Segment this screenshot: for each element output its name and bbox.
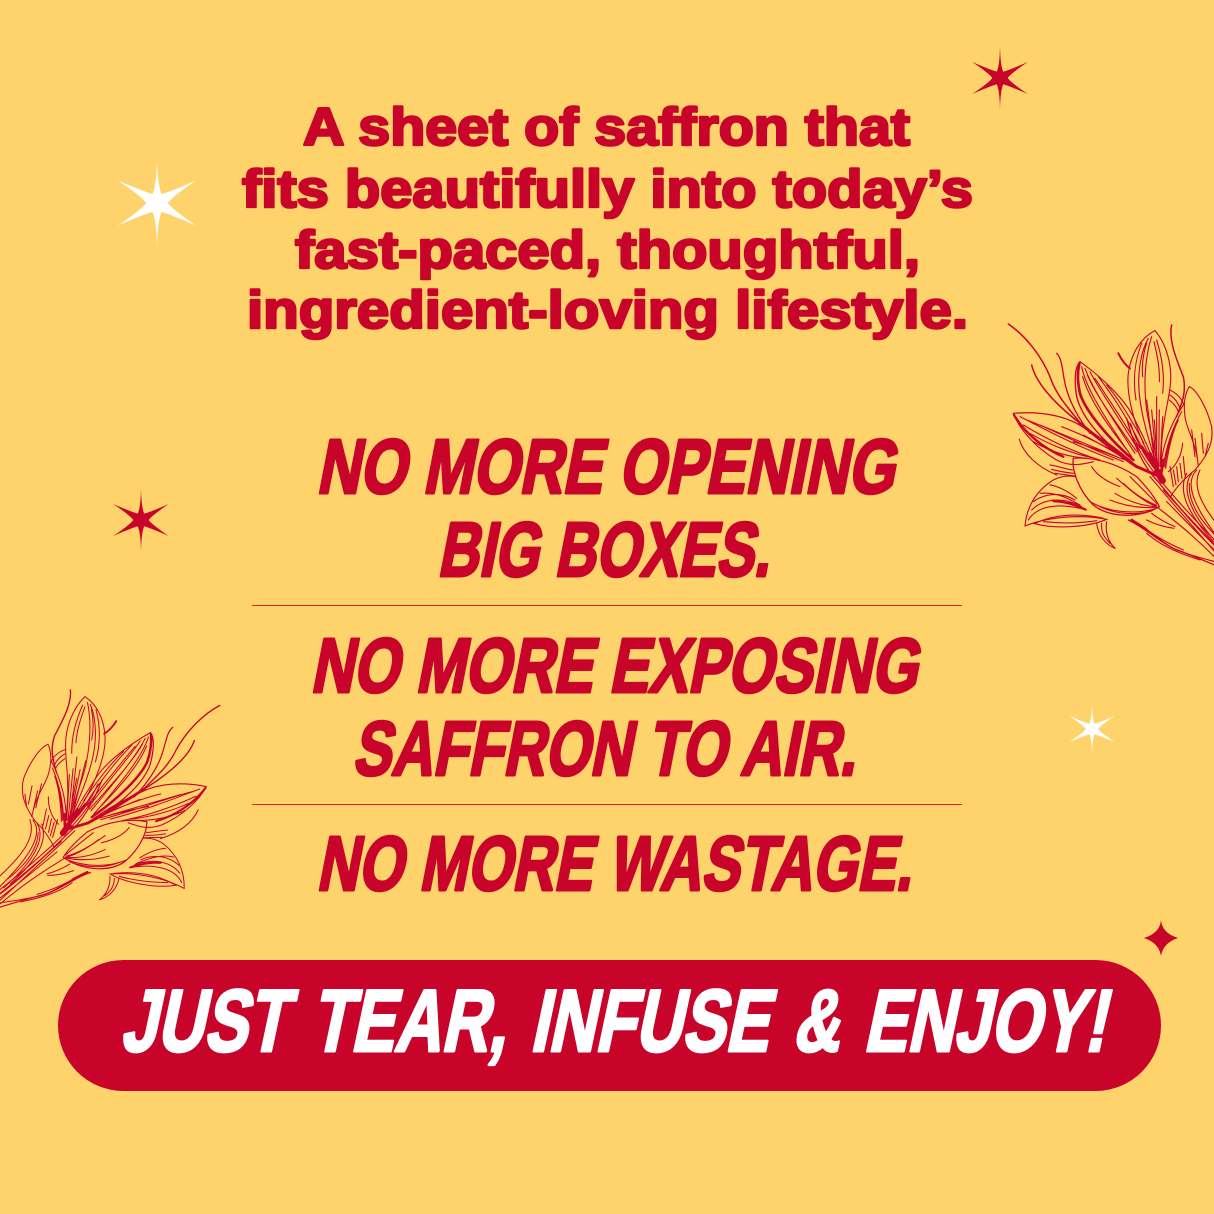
statement: no more opening big boxes: [313, 425, 907, 593]
icon: saffron flower left: [0, 683, 220, 936]
statement: no more opening big boxes: BIG BOXES.: [434, 508, 782, 593]
statement: no more exposing saffron to air: [307, 624, 930, 792]
statement: no more opening big boxes: NO MORE OPENING: [313, 425, 907, 510]
icon: red four-point star: [1144, 920, 1178, 956]
icon: white sparkle right: [1069, 703, 1115, 755]
intro heading: fits beautifully into today’s: [242, 160, 973, 219]
icon: white sparkle large: [118, 158, 196, 248]
divider two: [252, 804, 962, 805]
intro heading: fast-paced, thoughtful,: [295, 221, 920, 280]
intro heading: A sheet of saffron that: [303, 98, 910, 157]
icon: red sparkle left: [113, 488, 169, 552]
icon: saffron flower right: [1008, 324, 1214, 577]
statement: no more wastage: NO MORE WASTAGE.: [313, 822, 924, 907]
intro heading: [242, 98, 973, 340]
statement: no more exposing saffron to air: SAFFRON TO AIR.: [349, 707, 868, 792]
icon: red sparkle top right: [972, 46, 1028, 110]
intro heading: ingredient-loving lifestyle.: [247, 281, 968, 340]
call to action pill: [58, 960, 1161, 1091]
divider one: [252, 605, 962, 606]
statement: no more exposing saffron to air: NO MORE EXPOSING: [307, 624, 930, 709]
